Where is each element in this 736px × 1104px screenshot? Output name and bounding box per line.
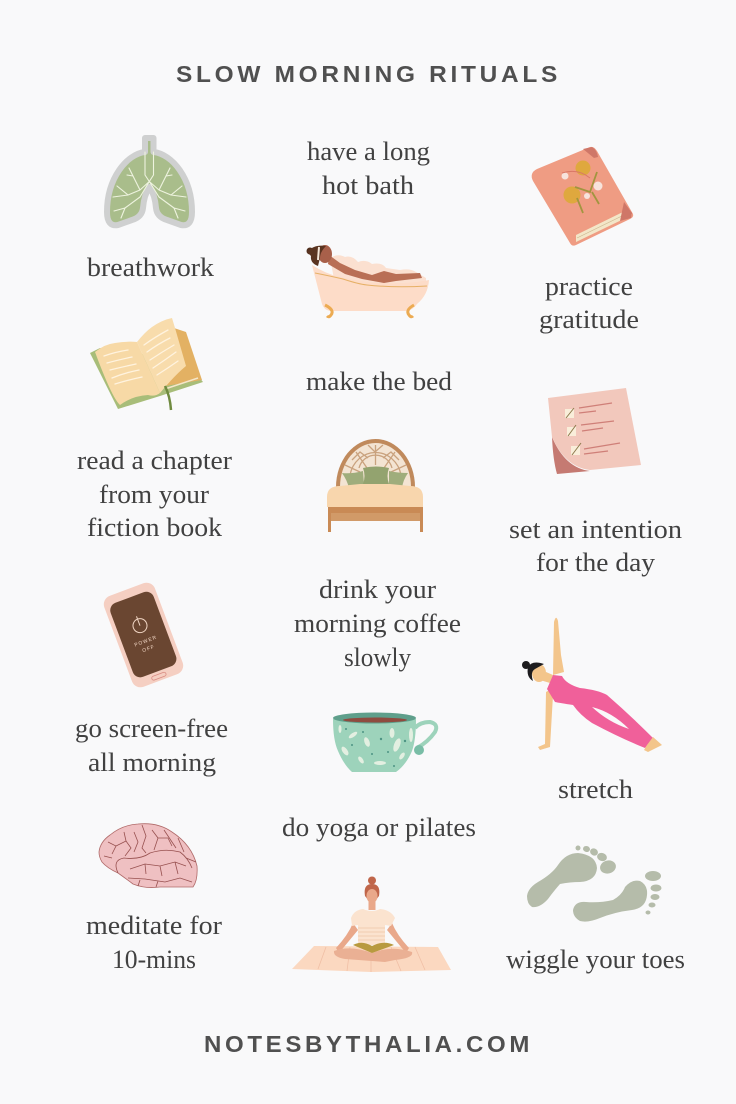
footer website: NOTESBYTHALIA.COM (204, 1031, 533, 1057)
icon: journal book (532, 147, 633, 246)
label: make the bed: make the bed (306, 367, 452, 396)
label: wiggle your toes: wiggle your toes (506, 945, 685, 974)
icon: phone powered off: POWER (134, 635, 158, 649)
label: read a chapter from your fiction book: read a chapter (77, 446, 232, 475)
label: go screen-free all morning (75, 714, 228, 777)
label: have a long hot bath: have a long (307, 137, 430, 166)
label: drink your morning coffee slowly: morning coffee (294, 609, 461, 638)
label: go screen-free all morning: all morning (88, 748, 216, 777)
icon: phone powered off: OFF (142, 644, 156, 654)
icon: meditating woman on mat (292, 876, 451, 972)
icon: footprints (527, 845, 662, 922)
icon: yoga side plank stretch (522, 618, 662, 752)
label: set an intention for the day: set an intention (509, 515, 682, 544)
label: have a long hot bath (307, 137, 430, 200)
label: read a chapter from your fiction book (77, 446, 232, 542)
label: do yoga or pilates: do yoga or pilates (282, 813, 476, 842)
icon: rattan bed (327, 439, 423, 532)
icon: green teacup (333, 712, 436, 772)
label: meditate for 10-mins: meditate for (86, 911, 222, 940)
label: drink your morning coffee slowly: slowly (344, 643, 411, 672)
label: breathwork: breathwork (87, 253, 214, 282)
label: read a chapter from your fiction book: fiction book (87, 513, 222, 542)
icon: woman in bath (306, 245, 429, 317)
label: drink your morning coffee slowly: drink your (319, 575, 436, 604)
icon: phone powered off (101, 580, 186, 690)
icon: brain (99, 824, 197, 888)
label: practice gratitude (539, 272, 639, 334)
label: meditate for 10-mins: 10-mins (112, 945, 196, 974)
icon: lungs (107, 138, 192, 225)
label: drink your morning coffee slowly (294, 575, 461, 672)
label: meditate for 10-mins (86, 911, 222, 974)
label: practice gratitude: gratitude (539, 305, 639, 334)
icon: checklist note (548, 388, 641, 474)
label: go screen-free all morning: go screen-free (75, 714, 228, 743)
label: stretch: stretch (558, 775, 633, 804)
icon: open book (90, 318, 203, 410)
label: have a long hot bath: hot bath (322, 171, 414, 200)
label: read a chapter from your fiction book: from your (99, 480, 209, 509)
label: practice gratitude: practice (545, 272, 633, 301)
label: set an intention for the day: for the day (536, 548, 655, 577)
label: set an intention for the day (509, 515, 682, 577)
title: SLOW MORNING RITUALS (176, 61, 561, 87)
